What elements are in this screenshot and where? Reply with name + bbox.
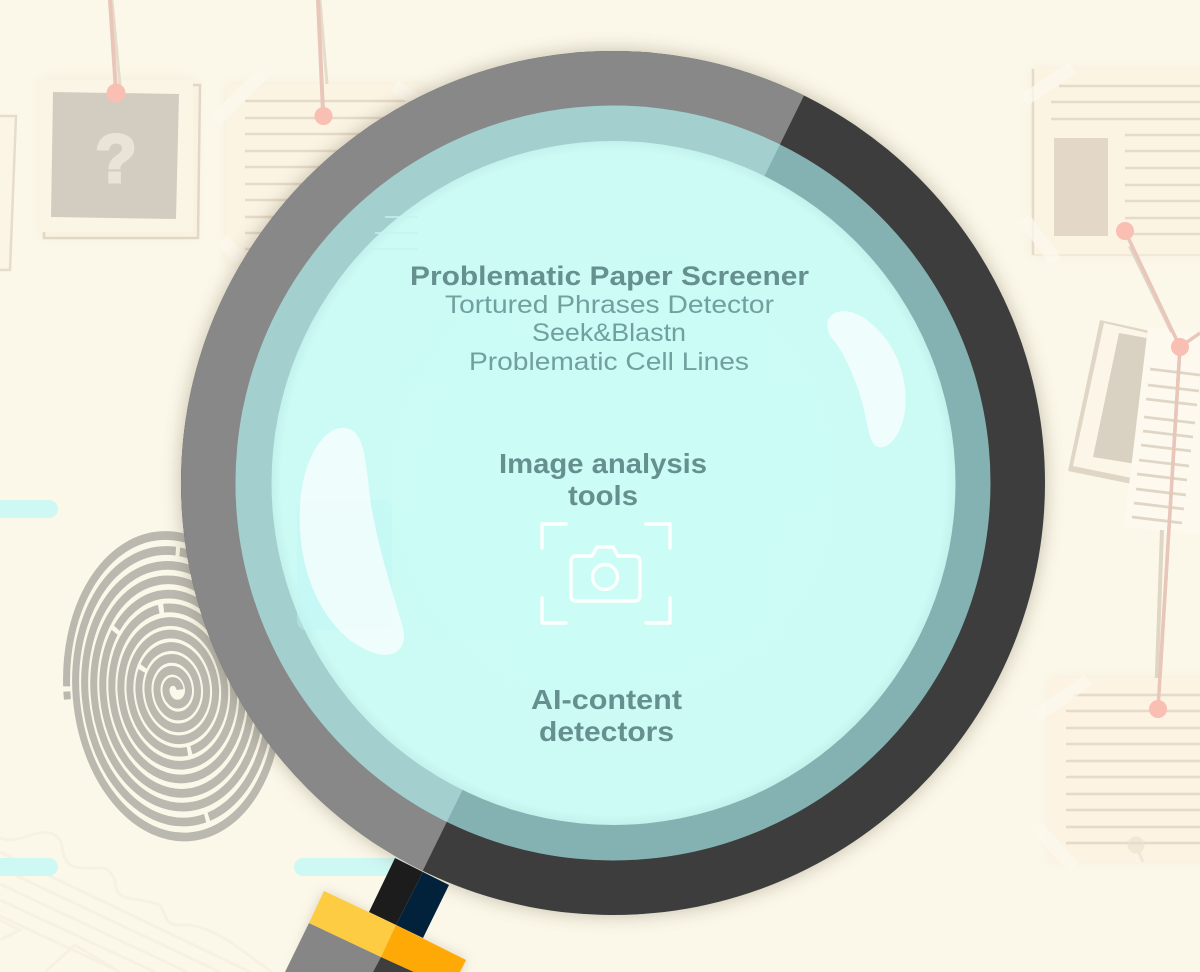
lens ring xyxy=(236,106,990,860)
question mark: ? xyxy=(95,121,137,197)
handle grip xyxy=(285,891,466,972)
cyan bar: upper left xyxy=(0,500,58,518)
strings connecting papers on right xyxy=(1116,222,1200,709)
drop shadow xyxy=(182,52,1044,914)
tape xyxy=(216,74,262,120)
lens face xyxy=(272,141,956,825)
tool: Problematic Cell Lines: Problematic Cell Lines xyxy=(469,348,749,376)
hanging string xyxy=(112,0,120,85)
hanging string xyxy=(320,0,327,84)
heading: Image analysis tools: tools xyxy=(568,480,638,511)
see-through paper lines in lens xyxy=(365,217,418,249)
cyan bar: lower middle xyxy=(294,858,404,876)
heading: Image analysis tools xyxy=(499,448,707,511)
article image xyxy=(1054,138,1108,236)
heading: Problematic Paper Screener: Problematic Paper Screener xyxy=(410,261,810,291)
handle neck xyxy=(369,858,449,938)
heading: AI-content detectors: AI-content xyxy=(531,684,682,715)
fingerprint xyxy=(54,527,291,846)
highlight: left xyxy=(300,428,404,655)
highlight: right xyxy=(827,311,906,447)
paper: left edge sheet xyxy=(0,116,16,270)
tool: Tortured Phrases Detector: Tortured Phrases Detector xyxy=(445,291,774,319)
paper: narrow white strip xyxy=(1124,327,1200,534)
icon: camera in viewfinder xyxy=(542,524,670,623)
photo placeholder xyxy=(51,92,179,219)
cyan bar: lower left xyxy=(0,858,58,876)
paper: question mark photo xyxy=(40,0,200,238)
faint pin xyxy=(1128,836,1144,862)
tilted photo xyxy=(1093,333,1152,464)
paper: text sheet upper left xyxy=(216,0,426,264)
heading: AI-content detectors: detectors xyxy=(539,716,674,747)
paper: lower right sheet xyxy=(1036,678,1200,868)
paper: tilted photo sheet xyxy=(1068,320,1200,498)
pin xyxy=(106,84,126,102)
text lines xyxy=(245,101,420,249)
pin upper xyxy=(1116,222,1134,240)
pins and string on right overlay xyxy=(1149,338,1189,718)
tape xyxy=(1024,68,1072,100)
pin xyxy=(314,107,332,125)
paper: upper right article xyxy=(1024,68,1200,262)
background circuit pattern xyxy=(0,833,272,972)
tape xyxy=(1036,680,1088,716)
outer rim xyxy=(181,51,1045,915)
magnifying glass xyxy=(181,51,1045,972)
text lines xyxy=(1066,695,1200,843)
strip lines xyxy=(1132,369,1200,523)
heading: Image analysis tools: Image analysis xyxy=(499,448,707,479)
handle shadow xyxy=(290,891,466,972)
tool: Seek&Blastn: Seek&Blastn xyxy=(532,319,686,347)
heading: AI-content detectors xyxy=(531,684,682,747)
article lines xyxy=(1051,86,1200,234)
see-through cyan bar xyxy=(297,500,392,630)
